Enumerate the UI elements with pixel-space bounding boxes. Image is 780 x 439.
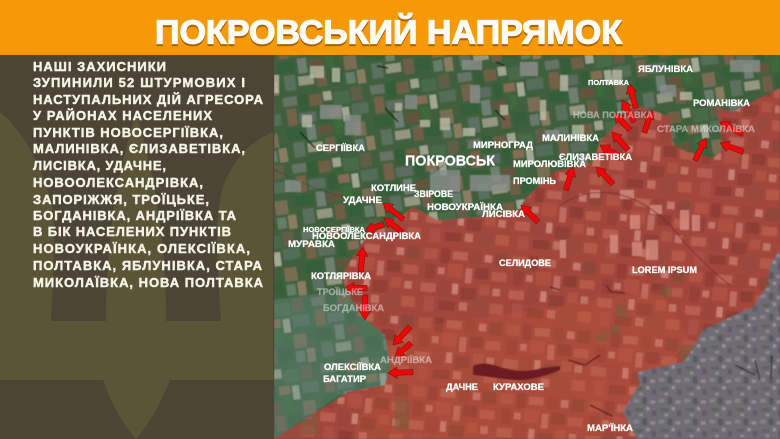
map labels: settlements: АНДРІЇВКА bbox=[380, 355, 433, 365]
text block: summary of repelled assaults: НОВООЛЕКСАНДРІВКА, bbox=[33, 175, 203, 190]
icon: trident emblem watermark bbox=[0, 112, 273, 439]
map labels: settlements: КОТЛИНЕ bbox=[371, 183, 416, 193]
map labels: settlements: МАР'ЇНКА bbox=[587, 423, 634, 433]
map labels: settlements: ПОЛТАВКА bbox=[588, 78, 630, 87]
text block: summary of repelled assaults: НАШІ ЗАХИСНИКИ bbox=[33, 59, 166, 74]
map labels: settlements: ЯБЛУНІВКА bbox=[638, 64, 694, 74]
text block: summary of repelled assaults: ЗУПИНИЛИ 52 ШТУРМОВИХ І bbox=[33, 75, 245, 90]
map labels: settlements: МИРНОГРАД bbox=[473, 140, 534, 150]
text block: summary of repelled assaults: ПОЛТАВКА, ЯБЛУНІВКА, СТАРА bbox=[33, 258, 263, 273]
map labels: settlements: СЕРГІЇВКА bbox=[316, 143, 366, 153]
text block: summary of repelled assaults: ЗАПОРІЖЖЯ, ТРОЇЦЬКЕ, bbox=[33, 192, 209, 207]
text block: summary of repelled assaults: НОВОУКРАЇНКА, ОЛЕКСІЇВКА, bbox=[33, 241, 250, 256]
map labels: settlements: НОВООЛЕКСАНДРІВКА bbox=[312, 231, 422, 241]
map labels: settlements: ЛИСІВКА bbox=[482, 209, 526, 219]
arrows: enemy assault directions bbox=[345, 82, 746, 378]
map labels: settlements: КУРАХОВЕ bbox=[493, 382, 544, 392]
title: ПОКРОВСЬКИЙ НАПРЯМОК bbox=[155, 12, 623, 50]
map labels: settlements: МИРОЛЮВІВКА bbox=[513, 159, 587, 169]
map labels: settlements: LOREM IPSUM bbox=[632, 265, 697, 275]
text block: summary of repelled assaults bbox=[33, 59, 264, 290]
panel: left text panel background bbox=[0, 55, 274, 439]
map labels: settlements: НОВОУКРАЇНКА bbox=[427, 202, 504, 212]
map labels: settlements: ДАЧНЕ bbox=[446, 382, 478, 392]
map: Kurakhove reservoir bbox=[473, 363, 560, 380]
map labels: settlements: УДАЧНЕ bbox=[343, 195, 382, 205]
title banner bbox=[0, 0, 780, 55]
text block: summary of repelled assaults: У РАЙОНАХ НАСЕЛЕНИХ bbox=[33, 108, 212, 123]
map labels: settlements bbox=[288, 64, 756, 433]
text block: summary of repelled assaults: ПУНКТІВ НОВОСЕРГІЇВКА, bbox=[33, 125, 223, 140]
map labels: settlements: ТРОЇЦЬКЕ bbox=[317, 287, 363, 297]
map: grey urban area bbox=[623, 250, 780, 439]
map labels: settlements: НОВОСЕРГІЇВКА bbox=[303, 226, 365, 234]
map: green fields base bbox=[274, 55, 780, 439]
map labels: settlements: МАЛИНІВКА bbox=[542, 133, 600, 143]
text block: summary of repelled assaults: МАЛИНІВКА, ЄЛИЗАВЕТІВКА, bbox=[33, 141, 245, 156]
map labels: settlements: КОТЛЯРІВКА bbox=[311, 271, 372, 281]
map labels: settlements: ЄЛИЗАВЕТІВКА bbox=[559, 152, 633, 162]
map labels: settlements: БОГДАНІВКА bbox=[323, 303, 385, 313]
text block: summary of repelled assaults: ЛИСІВКА, УДАЧНЕ, bbox=[33, 158, 166, 173]
text block: summary of repelled assaults: МИКОЛАЇВКА, НОВА ПОЛТАВКА bbox=[33, 275, 264, 290]
panel: satellite map bbox=[274, 55, 780, 439]
text block: summary of repelled assaults: НАСТУПАЛЬНИХ ДІЙ АГРЕСОРА bbox=[33, 92, 264, 107]
text block: summary of repelled assaults: БОГДАНІВКА, АНДРІЇВКА ТА bbox=[33, 208, 237, 223]
map labels: settlements: СЕЛИДОВЕ bbox=[499, 258, 551, 268]
title shadow: ПОКРОВСЬКИЙ НАПРЯМОК bbox=[155, 14, 623, 52]
map labels: settlements: СТАРА МИКОЛАЇВКА bbox=[657, 124, 756, 134]
map labels: settlements: ЗВІРОВЕ bbox=[414, 189, 453, 199]
text block: summary of repelled assaults: В БІК НАСЕЛЕНИХ ПУНКТІВ bbox=[33, 224, 231, 239]
map labels: settlements: НОВА ПОЛТАВКА bbox=[573, 110, 653, 120]
map: occupied red territory bbox=[274, 55, 780, 439]
map labels: settlements: ОЛЕКСІЇВКА bbox=[324, 362, 382, 372]
map labels: settlements: РОМАНІВКА bbox=[693, 98, 751, 108]
map labels: settlements: ПОКРОВСЬК bbox=[405, 152, 496, 170]
map labels: settlements: БАГАТИР bbox=[323, 374, 366, 384]
map labels: settlements: ПРОМІНЬ bbox=[513, 176, 557, 186]
map labels: settlements: МУРАВКА bbox=[288, 239, 336, 249]
